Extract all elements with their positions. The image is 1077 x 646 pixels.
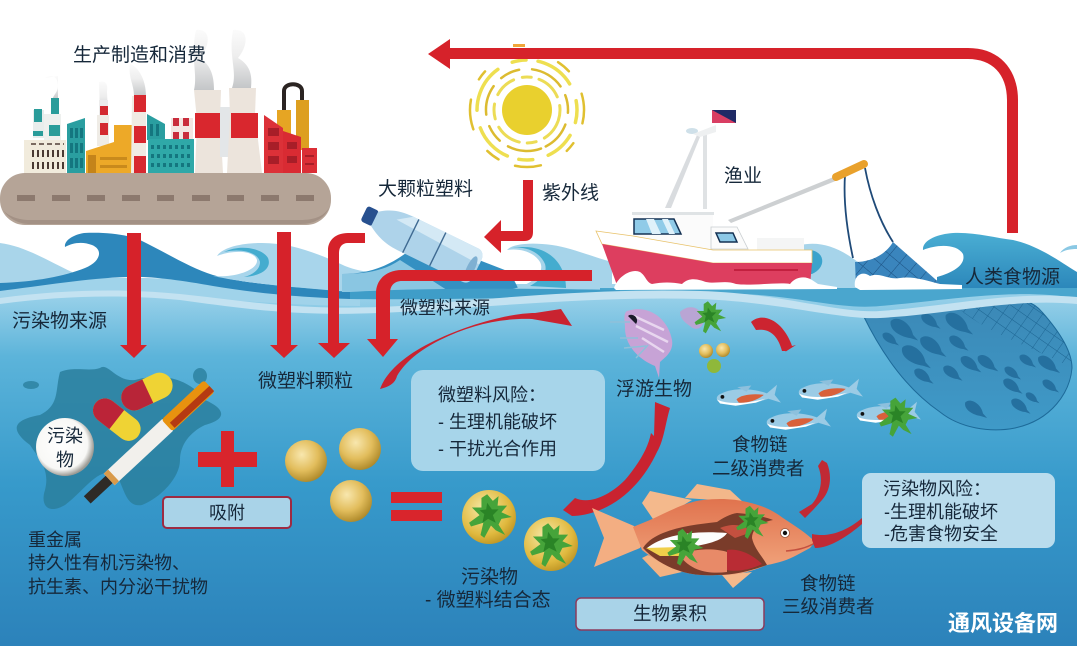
fishing boat [596, 110, 864, 290]
left chimneys [33, 110, 44, 138]
label: 微塑料来源: 微塑料来源 [400, 298, 490, 318]
bioaccumulation box: 生物累积 [633, 603, 707, 624]
foam [614, 271, 837, 290]
arrow: fishing to microplastics [367, 270, 592, 357]
tall red chimney [131, 96, 146, 173]
label: 三级消费者: 食物链 [800, 573, 856, 594]
arrow: top return [428, 39, 1018, 233]
arrow: bound state to plankton [563, 402, 670, 516]
wave behind boat stern [800, 244, 870, 290]
pollutant circle: 污染 [47, 426, 83, 446]
mast [703, 133, 707, 209]
label: 污染物-微塑料结合态: - 微塑料结合态 [425, 589, 551, 611]
shrimp with splat [680, 307, 704, 329]
pollutant circle: 物 [56, 450, 74, 470]
left pale wave [0, 243, 90, 292]
adsorption box [163, 497, 291, 528]
pollutant list: 抗生素、内分泌干扰物 [28, 577, 208, 597]
adsorption box: 吸附 [209, 503, 245, 523]
cigarette [82, 380, 215, 506]
plankton [610, 301, 730, 378]
pollutant-microplastic bound beads [462, 490, 578, 571]
watermark: 通风设备网 [948, 611, 1058, 636]
teal factory [147, 114, 165, 140]
small fish school [717, 379, 921, 437]
bioaccumulation box [576, 598, 764, 630]
label: 微塑料颗粒: 微塑料颗粒 [258, 370, 353, 392]
cooling towers [194, 90, 223, 173]
risk box: microplastic: 微塑料风险： [438, 385, 546, 405]
teal tower [67, 118, 85, 173]
third curling wave [507, 244, 612, 290]
shrimp large [610, 309, 672, 378]
label: 污染物-微塑料结合态: 污染物 [461, 566, 518, 588]
factories on road [0, 30, 331, 225]
small pink block [171, 118, 193, 139]
label: 污染物来源: 污染物来源 [12, 310, 107, 332]
pollutant circle [36, 418, 94, 476]
pollutant list: 持久性有机污染物、 [28, 553, 190, 573]
sun [449, 32, 605, 188]
belly cutaway [643, 513, 773, 575]
pale ribbon [0, 290, 1077, 318]
red buildings [264, 115, 283, 173]
label: 紫外线: 紫外线 [542, 182, 599, 204]
label: 大颗粒塑料: 大颗粒塑料 [378, 178, 473, 200]
title: 生产制造和消费: 生产制造和消费 [73, 44, 206, 66]
fins [642, 491, 692, 522]
microplastic beads [285, 428, 381, 522]
arrow: plankton to small fish [751, 318, 796, 352]
plus sign [198, 431, 257, 487]
arrow: UV to bottle [484, 180, 533, 253]
waves and surface [0, 233, 1077, 318]
risk box: microplastic: - 生理机能破坏 [438, 412, 557, 432]
spill stain [17, 367, 221, 509]
icon: plastic bottle [356, 197, 485, 285]
pill upper [117, 368, 177, 415]
arrow: big fish to human food [812, 518, 862, 548]
label: 二级消费者: 食物链 [732, 434, 788, 455]
label: 二级消费者: 二级消费者 [712, 458, 805, 479]
boom [728, 176, 838, 223]
pollutant list [28, 530, 208, 597]
arrow: factory to pollutant [120, 233, 147, 358]
label: 三级消费者: 三级消费者 [782, 596, 875, 617]
smoke plumes [45, 76, 58, 100]
hull red [602, 244, 812, 288]
label: 污染物-微塑料结合态 [425, 566, 551, 611]
fishing net bag with catch [863, 299, 1072, 430]
tail [592, 508, 644, 567]
orange building [86, 125, 133, 173]
risk box: pollutant: -危害食物安全 [884, 524, 998, 544]
ocean body [0, 284, 1077, 646]
pipes [284, 84, 302, 112]
risk box: pollutant: 污染物风险： [883, 479, 991, 499]
curling dark wave with long tail [0, 233, 350, 299]
risk box: microplastic: - 干扰光合作用 [438, 439, 557, 459]
arrow: small fish to big fish [799, 460, 830, 518]
curved arrow: to plankton source [380, 309, 572, 389]
risk box: microplastic [411, 370, 605, 471]
upper fishing net [845, 168, 962, 290]
beige building [24, 140, 66, 174]
water under the bottle [342, 245, 520, 292]
label: 二级消费者 [712, 434, 805, 479]
arrow: bottle to microplastic [318, 233, 365, 358]
body [633, 499, 815, 575]
hull white [596, 231, 812, 263]
flag [712, 110, 736, 123]
second curling wave [213, 243, 374, 293]
dark band at right [600, 288, 1077, 307]
label: 渔业: 渔业 [724, 165, 762, 187]
right curling wave [923, 233, 1077, 290]
eye [780, 528, 790, 538]
cabin [633, 215, 713, 250]
light water band [0, 278, 360, 306]
pill lower [88, 394, 145, 446]
big fish [592, 484, 815, 588]
label: 三级消费者 [782, 573, 875, 617]
road [0, 173, 331, 225]
pollutant list: 重金属 [28, 530, 82, 550]
risk box: pollutant [862, 473, 1055, 548]
pollutant illustration [17, 367, 221, 509]
label: 人类食物源: 人类食物源 [965, 266, 1060, 288]
arrow: factory to microplastics [270, 232, 298, 358]
equals sign [391, 492, 442, 521]
risk box: pollutant: -生理机能破坏 [884, 502, 998, 522]
slim chimney [99, 100, 108, 116]
label: 浮游生物: 浮游生物 [616, 378, 692, 400]
